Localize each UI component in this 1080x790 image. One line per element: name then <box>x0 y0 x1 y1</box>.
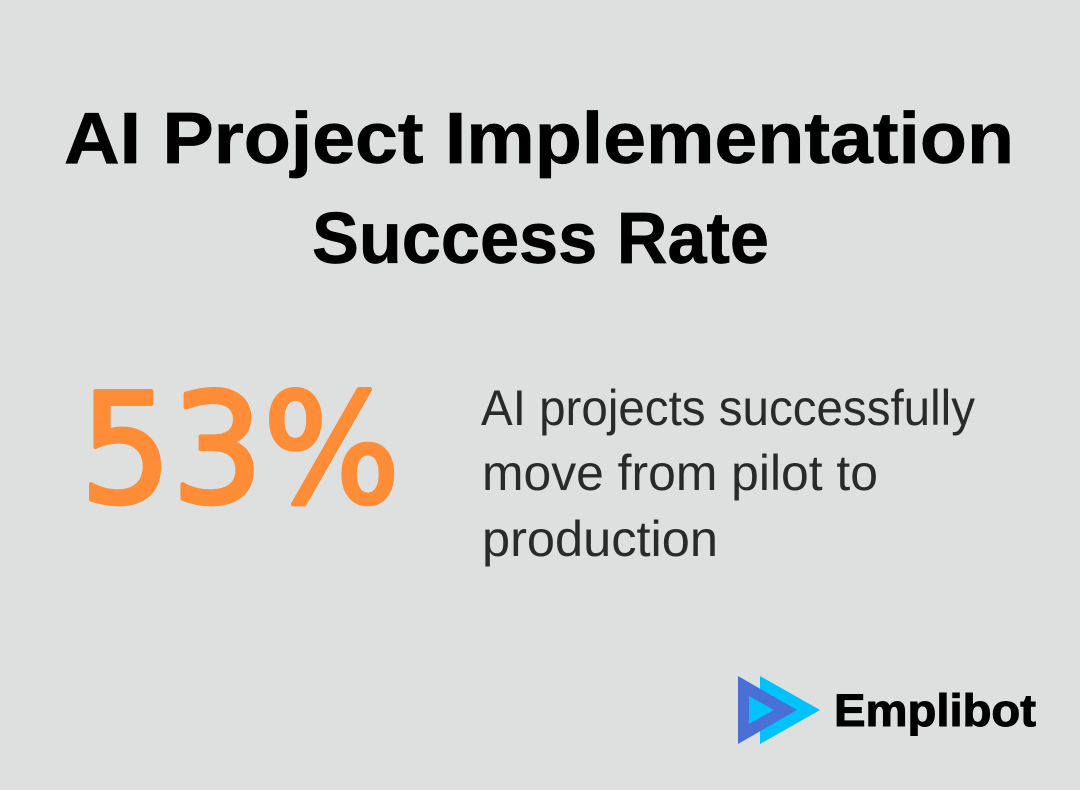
description text: AI projects successfully <box>481 380 975 436</box>
logo wordmark: Emplibot <box>834 685 1036 736</box>
description text: production <box>482 511 718 567</box>
description text <box>481 380 975 567</box>
title <box>64 99 1014 279</box>
description text: move from pilot to <box>482 445 878 501</box>
statistic: 53%: 53% <box>80 361 400 538</box>
title: AI Project Implementation <box>64 99 1014 179</box>
icon: double play triangles <box>738 676 820 744</box>
logo: Emplibot <box>738 676 1036 744</box>
title: Success Rate <box>312 199 769 279</box>
